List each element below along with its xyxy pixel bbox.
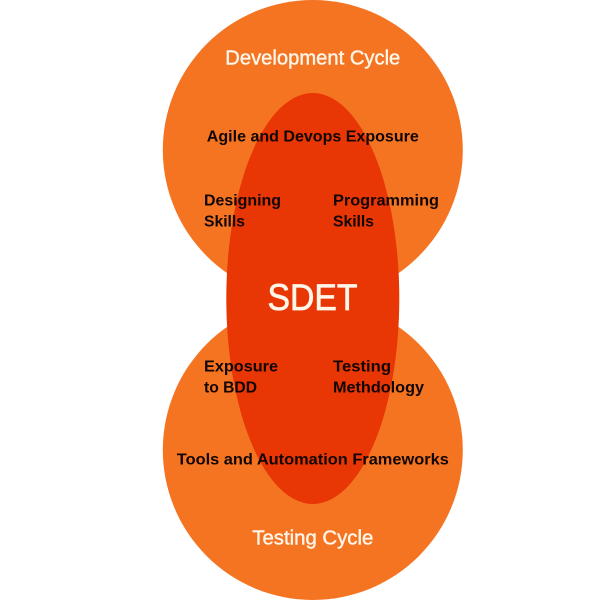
- heading: testing cycle: Testing Cycle: [252, 528, 373, 550]
- label: testing methdology: [333, 358, 424, 396]
- label: programming skills: Skills: [333, 214, 374, 230]
- label: designing skills: Skills: [204, 214, 245, 230]
- label: exposure to BDD: Exposure: [204, 358, 278, 376]
- label: programming skills: Programming: [333, 192, 439, 210]
- circle: development cycle: [163, 0, 463, 300]
- circle: testing cycle: [163, 300, 463, 600]
- label: agile and devops exposure: Agile and Devops Exposure: [207, 128, 419, 146]
- label: programming skills: [333, 192, 439, 230]
- label: designing skills: [204, 192, 281, 230]
- label: tools and automation frameworks: Tools and Automation Frameworks: [177, 452, 449, 468]
- label: exposure to BDD: to BDD: [204, 380, 257, 396]
- ellipse: SDET overlap: [226, 93, 399, 504]
- title: SDET: SDET: [268, 277, 358, 318]
- label: testing methdology: Methdology: [333, 380, 424, 396]
- label: testing methdology: Testing: [333, 358, 391, 376]
- label: exposure to BDD: [204, 358, 278, 396]
- heading: development cycle: Development Cycle: [225, 48, 400, 70]
- label: designing skills: Designing: [204, 192, 281, 210]
